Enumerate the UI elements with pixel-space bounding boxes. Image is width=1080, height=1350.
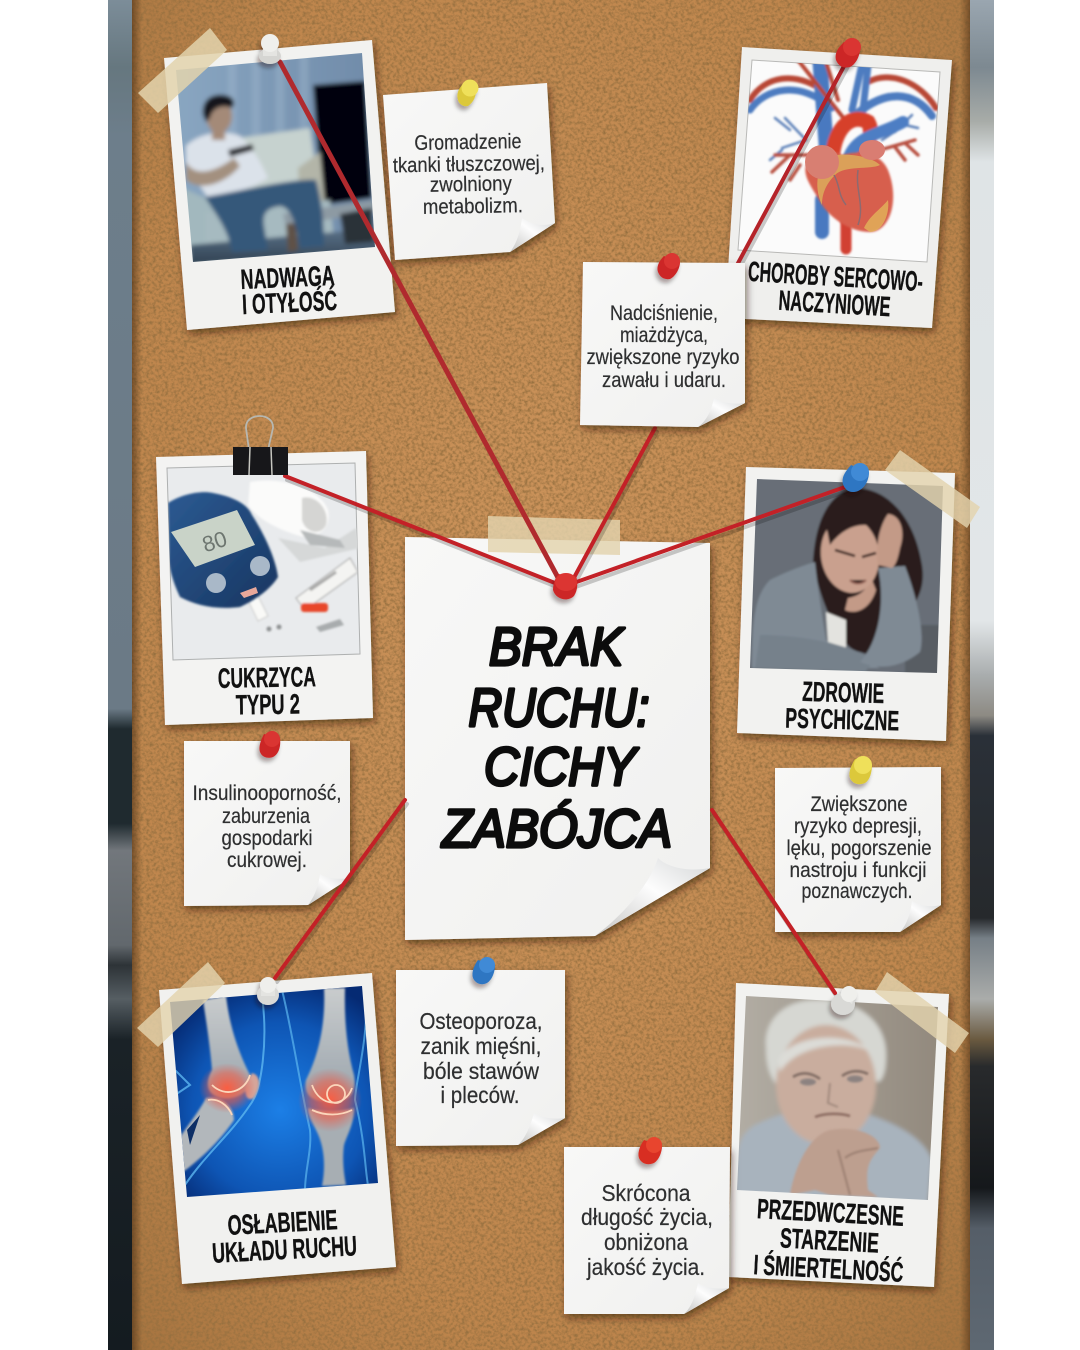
panel: choroby sercowo-naczyniowe xyxy=(725,47,952,328)
string: nadwaga xyxy=(280,62,562,585)
note: osteoporoza: bóle stawów xyxy=(423,1058,539,1084)
label: PRZEDWCZESNE xyxy=(756,1193,905,1232)
icon: red pin skrócona xyxy=(638,1137,662,1164)
string: cukrzyca xyxy=(285,476,560,585)
note: osteoporoza: i pleców. xyxy=(440,1082,520,1108)
photo: anatomical heart xyxy=(738,60,940,262)
label: ZDROWIE xyxy=(802,676,885,709)
label: STARZENIE xyxy=(779,1222,880,1259)
label: I OTYŁOŚĆ xyxy=(241,285,338,320)
string: serce xyxy=(737,55,850,265)
label: I ŚMIERTELNOŚĆ xyxy=(753,1249,904,1288)
tape: psychiczne photo xyxy=(885,450,980,528)
icon: white pin układ ruchu xyxy=(257,977,279,1005)
note: skrócona długość życia xyxy=(564,1147,730,1314)
photo: glucose meter: 80 xyxy=(199,526,230,557)
panel: osłabienie układu ruchu xyxy=(159,973,396,1284)
panel: nadwaga i otyłość xyxy=(164,40,395,330)
label xyxy=(211,1204,358,1269)
icon: red pin nadciśnienie xyxy=(657,253,680,279)
note: gromadzenie tkanki xyxy=(383,83,555,260)
photo: sad woman xyxy=(750,479,943,673)
label xyxy=(747,256,924,322)
note: zwiększone ryzyko depresji: nastroju i funkcji xyxy=(790,859,926,882)
string: nadciśnienie xyxy=(570,428,655,585)
label xyxy=(785,676,900,736)
label: NACZYNIOWE xyxy=(778,285,891,322)
icon: white pin starzenie xyxy=(831,986,857,1015)
note: osteoporoza: zanik mięśni, xyxy=(420,1033,542,1059)
icon: white pin nadwaga xyxy=(259,34,281,64)
blurred left strip xyxy=(108,0,133,1350)
tape: elderly photo xyxy=(875,972,969,1053)
title text: CICHY xyxy=(484,737,640,797)
note: insulinooporność: zaburzenia xyxy=(222,805,310,828)
panel: cukrzyca typu 2 xyxy=(156,451,373,725)
icon: yellow pin depresja xyxy=(849,756,872,784)
photo: knee x-ray xyxy=(165,980,385,1200)
string: układ ruchu xyxy=(275,800,405,978)
note: zwiększone ryzyko depresji: poznawczych. xyxy=(802,880,912,903)
icon: binder clip xyxy=(233,416,288,475)
note: nadciśnienie: zwiększone ryzyko xyxy=(586,346,740,369)
label: UKŁADU RUCHU xyxy=(211,1230,358,1269)
note: zwiększone ryzyko depresji: lęku, pogorszenie xyxy=(786,837,932,860)
label xyxy=(218,661,316,721)
note: zwiększone ryzyko depresji: Zwiększone xyxy=(810,793,908,816)
title text xyxy=(440,617,672,859)
note: skrócona długość życia: Skrócona xyxy=(602,1180,691,1206)
note: gromadzenie tkanki: zwolniony xyxy=(430,172,513,197)
cork board xyxy=(132,0,970,1350)
note: insulinooporność: Insulinooporność, xyxy=(192,782,342,805)
note: gromadzenie tkanki: tkanki tłuszczowej, xyxy=(393,152,545,177)
note: osteoporoza: Osteoporoza, xyxy=(420,1008,542,1034)
icon: yellow pin gromadzenie xyxy=(457,80,478,106)
note: skrócona długość życia: długość życia, xyxy=(581,1204,713,1230)
note: nadciśnienie: zawału i udaru. xyxy=(602,369,726,392)
title text: RUCHU: xyxy=(468,678,650,738)
note: nadciśnienie: miażdżyca, xyxy=(620,324,708,347)
note: skrócona długość życia: obniżona xyxy=(604,1229,688,1255)
panel: zdrowie psychiczne xyxy=(737,467,955,741)
note: zwiększone ryzyko depresji: ryzyko depresji, xyxy=(794,815,922,838)
note: zwiększone ryzyko depresji xyxy=(775,767,941,932)
label: TYPU 2 xyxy=(236,688,300,721)
label: PSYCHICZNE xyxy=(785,703,900,736)
string: psychiczne xyxy=(568,487,845,585)
string: starzenie xyxy=(712,810,835,993)
label: CHOROBY SERCOWO- xyxy=(747,256,924,297)
label: OSŁABIENIE xyxy=(227,1204,338,1241)
icon: red pin insulinooporność xyxy=(259,731,280,758)
panel: przedwczesne starzenie i śmiertelność xyxy=(728,983,949,1288)
icon: blue pin psychiczne xyxy=(843,463,869,492)
note: insulinooporność: gospodarki xyxy=(222,827,312,850)
icon: center red pin xyxy=(553,573,577,599)
note: nadciśnienie: Nadciśnienie, xyxy=(610,302,718,325)
label: NADWAGA xyxy=(240,260,335,295)
photo: elderly woman xyxy=(737,996,938,1200)
label xyxy=(753,1193,905,1288)
tape: top left photo xyxy=(138,28,227,113)
note: nadciśnienie xyxy=(580,262,745,427)
title text: BRAK xyxy=(489,617,625,677)
photo: man on sofa watching TV xyxy=(170,50,380,265)
note: gromadzenie tkanki: Gromadzenie xyxy=(414,130,522,155)
note: osteoporoza xyxy=(396,970,565,1146)
blurred right strip xyxy=(969,0,994,1350)
icon: blue pin osteoporoza xyxy=(472,957,495,984)
tape: title note xyxy=(488,516,620,555)
photo: glucose meter xyxy=(167,463,360,660)
note: skrócona długość życia: jakość życia. xyxy=(586,1254,705,1280)
icon: red pin serce xyxy=(836,38,861,68)
tape: knee photo xyxy=(137,962,225,1047)
note: gromadzenie tkanki: metabolizm. xyxy=(423,194,523,219)
note: insulinooporność xyxy=(184,741,350,906)
note: insulinooporność: cukrowej. xyxy=(227,849,307,872)
title text: ZABÓJCA xyxy=(440,799,672,859)
red strings xyxy=(275,55,852,997)
label: CUKRZYCA xyxy=(218,661,316,694)
central note: title xyxy=(405,537,710,940)
label xyxy=(240,260,338,320)
